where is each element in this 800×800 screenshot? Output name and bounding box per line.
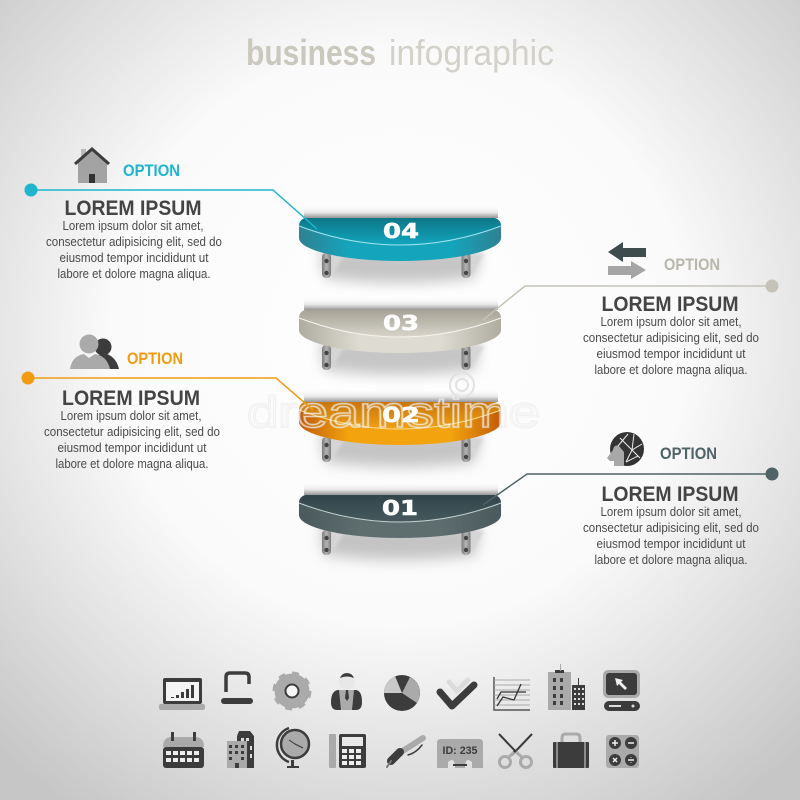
connector: option 4 (24, 184, 317, 229)
watermark: dreamstime (247, 388, 540, 437)
panel: option 3 (583, 242, 759, 377)
icon: calculator (329, 734, 366, 768)
title: business (246, 32, 376, 73)
icon: computer (603, 670, 640, 711)
watermark: dreamstime (247, 388, 540, 437)
icon: open lock (221, 673, 253, 710)
body text: labore et dolore magna aliqua. (594, 552, 748, 567)
icon: globe clock (277, 728, 309, 768)
shelf 02 (299, 388, 501, 467)
body text: consectetur adipisicing elit, sed do (46, 234, 222, 249)
body text: labore et dolore magna aliqua. (58, 266, 210, 281)
icon: people (70, 334, 119, 369)
connector: option 3 (483, 280, 778, 320)
icon: briefcase (553, 734, 589, 768)
heading: LOREM IPSUM (64, 197, 202, 220)
panel: option 4 (46, 149, 222, 281)
body text: Lorem ipsum dolor sit amet, (600, 504, 742, 519)
number 04: 04 (383, 219, 419, 243)
watermark (247, 373, 540, 437)
number 02: 02 (382, 403, 420, 427)
body text: eiusmod tempor incididunt ut (58, 440, 207, 455)
icon: pen (387, 738, 423, 767)
icon: id card (437, 739, 483, 768)
icon: office buildings (548, 664, 585, 710)
option label: OPTION (660, 445, 717, 463)
icon: check mark (440, 680, 474, 706)
option label: OPTION (127, 350, 183, 368)
icon row (159, 664, 640, 768)
body text (583, 314, 759, 377)
body text (583, 504, 759, 567)
body text (46, 218, 222, 281)
option label: OPTION (664, 256, 720, 274)
body text: consectetur adipisicing elit, sed do (44, 424, 220, 439)
icon: gear (275, 674, 309, 708)
icon: id card: ID: 235 (442, 745, 478, 757)
number 01: 01 (382, 496, 418, 520)
body text (44, 408, 220, 471)
option label: OPTION (123, 162, 180, 180)
shelf 03 (299, 296, 501, 375)
connector: option 2 (22, 372, 313, 410)
icon: calendar (163, 732, 204, 768)
heading: LOREM IPSUM (602, 293, 738, 316)
panel: option 2 (44, 334, 220, 471)
number 03: 03 (383, 311, 419, 335)
shelf 01 (299, 481, 501, 560)
icon: pie chart (384, 675, 420, 711)
heading: LOREM IPSUM (602, 483, 738, 506)
shelf 04 (299, 204, 501, 283)
body text: Lorem ipsum dolor sit amet, (60, 408, 202, 423)
body text: eiusmod tempor incididunt ut (596, 536, 746, 551)
body text: eiusmod tempor incididunt ut (596, 346, 746, 361)
body text: labore et dolore magna aliqua. (594, 362, 748, 377)
icon: head with network (607, 432, 644, 466)
icon: scissors (499, 734, 532, 768)
icon: businessman (331, 673, 362, 710)
body text: consectetur adipisicing elit, sed do (583, 520, 759, 535)
heading: LOREM IPSUM (62, 387, 200, 410)
icon: house (75, 149, 109, 183)
panel: option 1 (583, 432, 759, 567)
body text: consectetur adipisicing elit, sed do (583, 330, 759, 345)
title (246, 32, 554, 73)
icon: line chart (494, 677, 530, 710)
body text: Lorem ipsum dolor sit amet, (62, 218, 204, 233)
title: infographic (389, 32, 554, 73)
body text: Lorem ipsum dolor sit amet, (600, 314, 742, 329)
connector: option 1 (483, 468, 778, 505)
icon: apartment buildings (227, 731, 254, 768)
body text: eiusmod tempor incididunt ut (60, 250, 209, 265)
body text: labore et dolore magna aliqua. (56, 456, 208, 471)
icon: laptop chart (159, 678, 205, 710)
icon: arrows (608, 242, 646, 279)
icon: math operators (606, 735, 639, 768)
